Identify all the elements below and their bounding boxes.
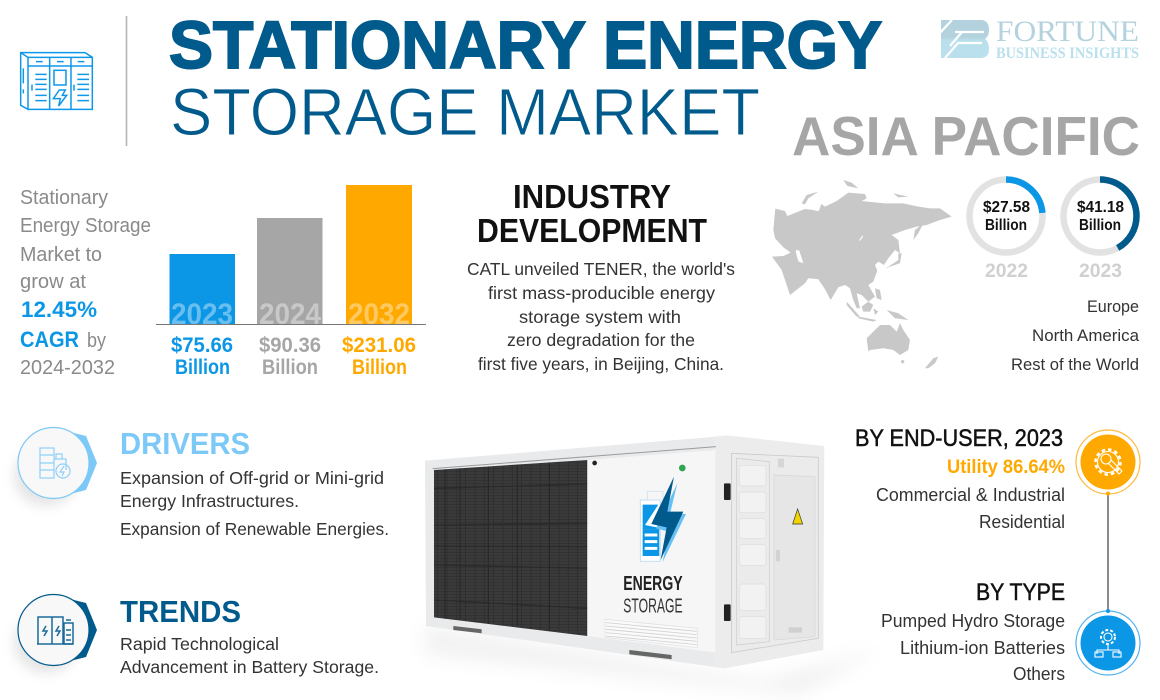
panel: industry development: zero degradation for the xyxy=(507,330,695,350)
logo: Fortune Business Insights: BUSINESS INSIGHTS xyxy=(996,45,1139,62)
donut: 2022 xyxy=(970,180,1042,282)
panel: trends: Advancement in Battery Storage. xyxy=(120,657,379,677)
bar chart: market size: $231.06 xyxy=(342,334,416,357)
title xyxy=(169,8,882,150)
bar chart: market size: Billion xyxy=(175,356,230,379)
connector line xyxy=(1107,494,1109,611)
text: CAGR statement: Market to xyxy=(20,244,102,266)
list: other regions xyxy=(1011,297,1140,374)
bar chart: market size: $75.66 xyxy=(171,334,233,357)
panel: by end-user: BY END-USER, 2023 xyxy=(855,425,1063,452)
panel: industry development: CATL unveiled TENER, the world's xyxy=(467,259,735,279)
panel: industry development: first mass-producible energy xyxy=(488,283,715,303)
donut: 2023 xyxy=(1064,180,1136,282)
list: other regions: North America xyxy=(1032,326,1140,345)
panel: drivers: Expansion of Off-grid or Mini-grid xyxy=(120,468,384,488)
list: other regions: Rest of the World xyxy=(1011,355,1139,374)
icon: network gear badge xyxy=(1076,609,1140,675)
panel: by type xyxy=(881,579,1140,684)
bar chart: market size: $90.36 xyxy=(259,334,321,357)
panel: by type: Lithium-ion Batteries xyxy=(900,638,1065,658)
panel: trends xyxy=(14,594,379,677)
container floor shadow xyxy=(425,625,880,695)
panel: by end-user: Utility 86.64% xyxy=(947,457,1065,478)
panel: by end-user xyxy=(855,425,1140,532)
divider xyxy=(126,16,127,146)
icon: drivers badge xyxy=(14,428,97,506)
panel: trends: Rapid Technological xyxy=(120,634,279,654)
logo: Fortune Business Insights: FORTUNE xyxy=(996,15,1139,48)
battery rack panel xyxy=(430,457,590,640)
title: STORAGE MARKET xyxy=(170,75,760,150)
heading: Asia Pacific: ASIA PACIFIC xyxy=(792,105,1140,167)
donut: 2023: 2023 xyxy=(1079,261,1122,282)
bar chart: market size: Billion xyxy=(352,356,407,379)
panel: industry development: INDUSTRY xyxy=(513,178,671,215)
panel: industry development: first five years, in Beijing, China. xyxy=(478,354,724,374)
panel: industry development: storage system with xyxy=(519,307,681,327)
panel: by end-user: Residential xyxy=(979,512,1065,532)
panel: drivers xyxy=(14,426,389,539)
panel: by type: BY TYPE xyxy=(976,579,1065,606)
panel: by type: Pumped Hydro Storage xyxy=(881,611,1065,631)
bar chart: market size: 2023 xyxy=(171,298,233,331)
map: Asia Pacific xyxy=(772,180,952,368)
text: CAGR statement: CAGR xyxy=(20,327,79,352)
illustration: energy storage container xyxy=(425,435,824,668)
logo: Fortune Business Insights xyxy=(939,15,1139,62)
energy storage logo: ENERGY xyxy=(623,573,683,595)
donut: 2022: $27.58 xyxy=(983,199,1030,216)
text: CAGR statement: Stationary xyxy=(20,187,108,209)
title: STATIONARY ENERGY xyxy=(169,8,882,83)
bar chart: market size xyxy=(156,185,426,379)
list: other regions: Europe xyxy=(1087,297,1139,316)
panel: drivers: Energy Infrastructures. xyxy=(120,491,299,511)
icon: gear and wrench badge xyxy=(1076,430,1140,496)
panel: drivers: DRIVERS xyxy=(120,426,250,461)
panel: drivers: Expansion of Renewable Energies. xyxy=(120,519,389,539)
bar chart: market size: Billion xyxy=(262,356,318,379)
icon: energy storage cabinet xyxy=(21,53,92,109)
panel: trends: TRENDS xyxy=(120,594,241,629)
text: CAGR statement: 12.45% xyxy=(21,297,97,322)
panel: by type: Others xyxy=(1013,664,1065,684)
donut: 2022: 2022 xyxy=(985,261,1028,282)
donut: 2022: Billion xyxy=(985,217,1027,234)
text: CAGR statement xyxy=(20,187,151,379)
donut: 2023: $41.18 xyxy=(1077,199,1124,216)
text: CAGR statement: 2024-2032 xyxy=(20,357,115,379)
panel: industry development xyxy=(467,178,735,374)
bar chart: market size: 2032 xyxy=(348,298,410,331)
icon: trends badge xyxy=(14,594,97,673)
text: CAGR statement: grow at xyxy=(20,271,86,293)
panel: industry development: DEVELOPMENT xyxy=(477,212,707,249)
bar chart: market size: 2024 xyxy=(259,298,321,331)
text: CAGR statement: Energy Storage xyxy=(20,215,151,237)
panel: by end-user: Commercial & Industrial xyxy=(876,485,1065,505)
text: CAGR statement: by xyxy=(87,330,106,352)
donut: 2023: Billion xyxy=(1079,217,1121,234)
energy storage logo: STORAGE xyxy=(623,596,683,618)
energy storage logo xyxy=(623,477,686,618)
